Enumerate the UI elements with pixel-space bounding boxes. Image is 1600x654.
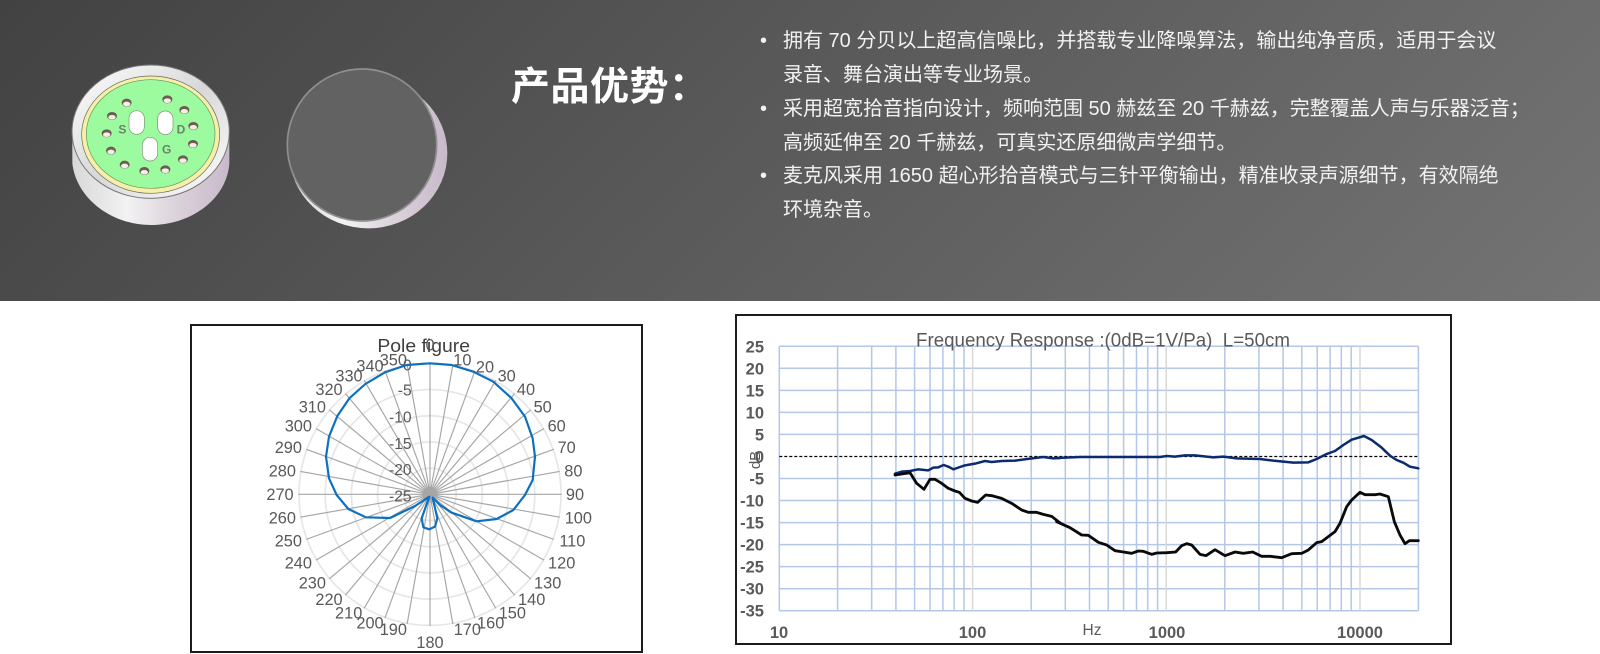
angle labels: 350 bbox=[380, 352, 407, 370]
off-axis response curve bbox=[895, 473, 1418, 558]
radial scale labels: -15 bbox=[389, 436, 412, 453]
angle labels: 260 bbox=[269, 510, 296, 528]
angle labels: 30 bbox=[498, 368, 516, 386]
radial scale labels bbox=[389, 358, 412, 505]
banner panel: product advantages bbox=[0, 0, 1600, 301]
angle labels: 120 bbox=[548, 554, 575, 572]
angle labels: 140 bbox=[518, 591, 545, 609]
angle labels: 80 bbox=[564, 462, 582, 480]
angle labels: 280 bbox=[269, 462, 296, 480]
radial scale labels: 0 bbox=[403, 358, 412, 375]
radial scale labels: -10 bbox=[389, 409, 412, 426]
x axis title: Hz bbox=[1083, 622, 1101, 639]
angle labels bbox=[266, 337, 592, 652]
angle labels: 110 bbox=[559, 533, 585, 551]
angle labels: 290 bbox=[275, 439, 302, 457]
angle labels: 340 bbox=[356, 358, 384, 376]
icon: capsule front with mesh disc bbox=[287, 69, 447, 228]
text block: advantage bullets: 拥有 70 分贝以上超高信噪比，并搭载专业降噪算法，输出纯净音质，适用于会议 bbox=[783, 30, 1496, 52]
y axis labels: 5 bbox=[755, 426, 764, 444]
y axis labels: -30 bbox=[740, 581, 764, 599]
angle labels: 230 bbox=[299, 574, 326, 592]
text block: advantage bullets: • bbox=[760, 98, 767, 120]
chart title: Pole figure bbox=[377, 335, 470, 356]
icon: capsule back with solder pads: D bbox=[177, 122, 186, 136]
angle labels: 210 bbox=[335, 604, 362, 622]
y axis labels: 25 bbox=[746, 338, 764, 356]
text block: advantage bullets: • bbox=[760, 30, 767, 52]
angle labels: 60 bbox=[548, 418, 566, 436]
y axis labels: 0 bbox=[755, 448, 764, 466]
icon: capsule back with solder pads bbox=[72, 65, 229, 225]
angle labels: 100 bbox=[565, 510, 592, 528]
angle labels: 170 bbox=[454, 621, 481, 639]
heading: product advantages: 产品优势： bbox=[511, 66, 709, 109]
chart title: Frequency Response :(0dB=1V/Pa) L=50cm bbox=[916, 330, 1290, 352]
text block: advantage bullets: 环境杂音。 bbox=[783, 199, 883, 221]
x axis labels: 10000 bbox=[1337, 624, 1383, 642]
angle labels: 220 bbox=[315, 591, 343, 609]
angle labels: 310 bbox=[299, 398, 326, 416]
panel: polar pattern chart bbox=[190, 324, 643, 653]
angle labels: 190 bbox=[380, 621, 407, 639]
polar response curve bbox=[326, 363, 535, 529]
text block: advantage bullets: 录音、舞台演出等专业场景。 bbox=[783, 64, 1043, 86]
icon: microphone capsule views bbox=[72, 64, 448, 228]
panel: frequency response chart bbox=[735, 314, 1452, 645]
angle labels: 270 bbox=[266, 486, 294, 504]
angle labels: 300 bbox=[285, 418, 312, 436]
y axis labels: -10 bbox=[740, 492, 764, 510]
x axis labels: 1000 bbox=[1149, 624, 1185, 642]
angle labels: 70 bbox=[558, 439, 576, 457]
x axis labels bbox=[770, 624, 1383, 642]
angle labels: 40 bbox=[517, 381, 535, 399]
y axis labels: -35 bbox=[740, 603, 764, 621]
on-axis response curve bbox=[895, 436, 1418, 474]
angle labels: 240 bbox=[285, 554, 312, 572]
text block: advantage bullets: 采用超宽拾音指向设计，频响范围 50 赫兹至 20 千赫兹，完整覆盖人声与乐器泛音； bbox=[783, 98, 1530, 120]
radial scale labels: -5 bbox=[398, 383, 412, 400]
y axis labels bbox=[740, 338, 764, 621]
angle labels: 320 bbox=[315, 381, 343, 399]
x axis labels: 100 bbox=[959, 624, 986, 642]
angle labels: 250 bbox=[275, 533, 302, 551]
icon: capsule back with solder pads: G bbox=[162, 143, 171, 157]
radial scale labels: -20 bbox=[389, 462, 412, 479]
angle labels: 50 bbox=[534, 398, 552, 416]
radial scale labels: -25 bbox=[389, 488, 412, 505]
y axis labels: -5 bbox=[749, 470, 764, 488]
y axis title: dB bbox=[747, 451, 764, 469]
text block: advantage bullets: 高频延伸至 20 千赫兹，可真实还原细微声学细节。 bbox=[783, 132, 1236, 154]
angle labels: 20 bbox=[476, 358, 494, 376]
angle labels: 150 bbox=[499, 604, 526, 622]
y axis labels: 20 bbox=[746, 360, 764, 378]
angle labels: 0 bbox=[425, 337, 435, 355]
y axis labels: -15 bbox=[740, 515, 764, 533]
x axis labels: 10 bbox=[770, 624, 788, 642]
angle labels: 130 bbox=[534, 574, 561, 592]
y axis labels: 10 bbox=[746, 404, 764, 422]
angle labels: 90 bbox=[566, 486, 584, 504]
angle labels: 10 bbox=[453, 352, 471, 370]
angle labels: 160 bbox=[477, 614, 504, 632]
angle labels: 330 bbox=[335, 368, 363, 386]
icon: capsule back with solder pads: S bbox=[118, 122, 126, 136]
angle labels: 200 bbox=[356, 614, 384, 632]
y axis labels: -20 bbox=[740, 537, 764, 555]
y axis labels: -25 bbox=[740, 559, 764, 577]
text block: advantage bullets bbox=[760, 30, 1530, 221]
text block: advantage bullets: • bbox=[760, 165, 767, 187]
y axis labels: 15 bbox=[746, 382, 764, 400]
text block: advantage bullets: 麦克风采用 1650 超心形拾音模式与三针平衡输出，精准收录声源细节，有效隔绝 bbox=[783, 165, 1499, 187]
